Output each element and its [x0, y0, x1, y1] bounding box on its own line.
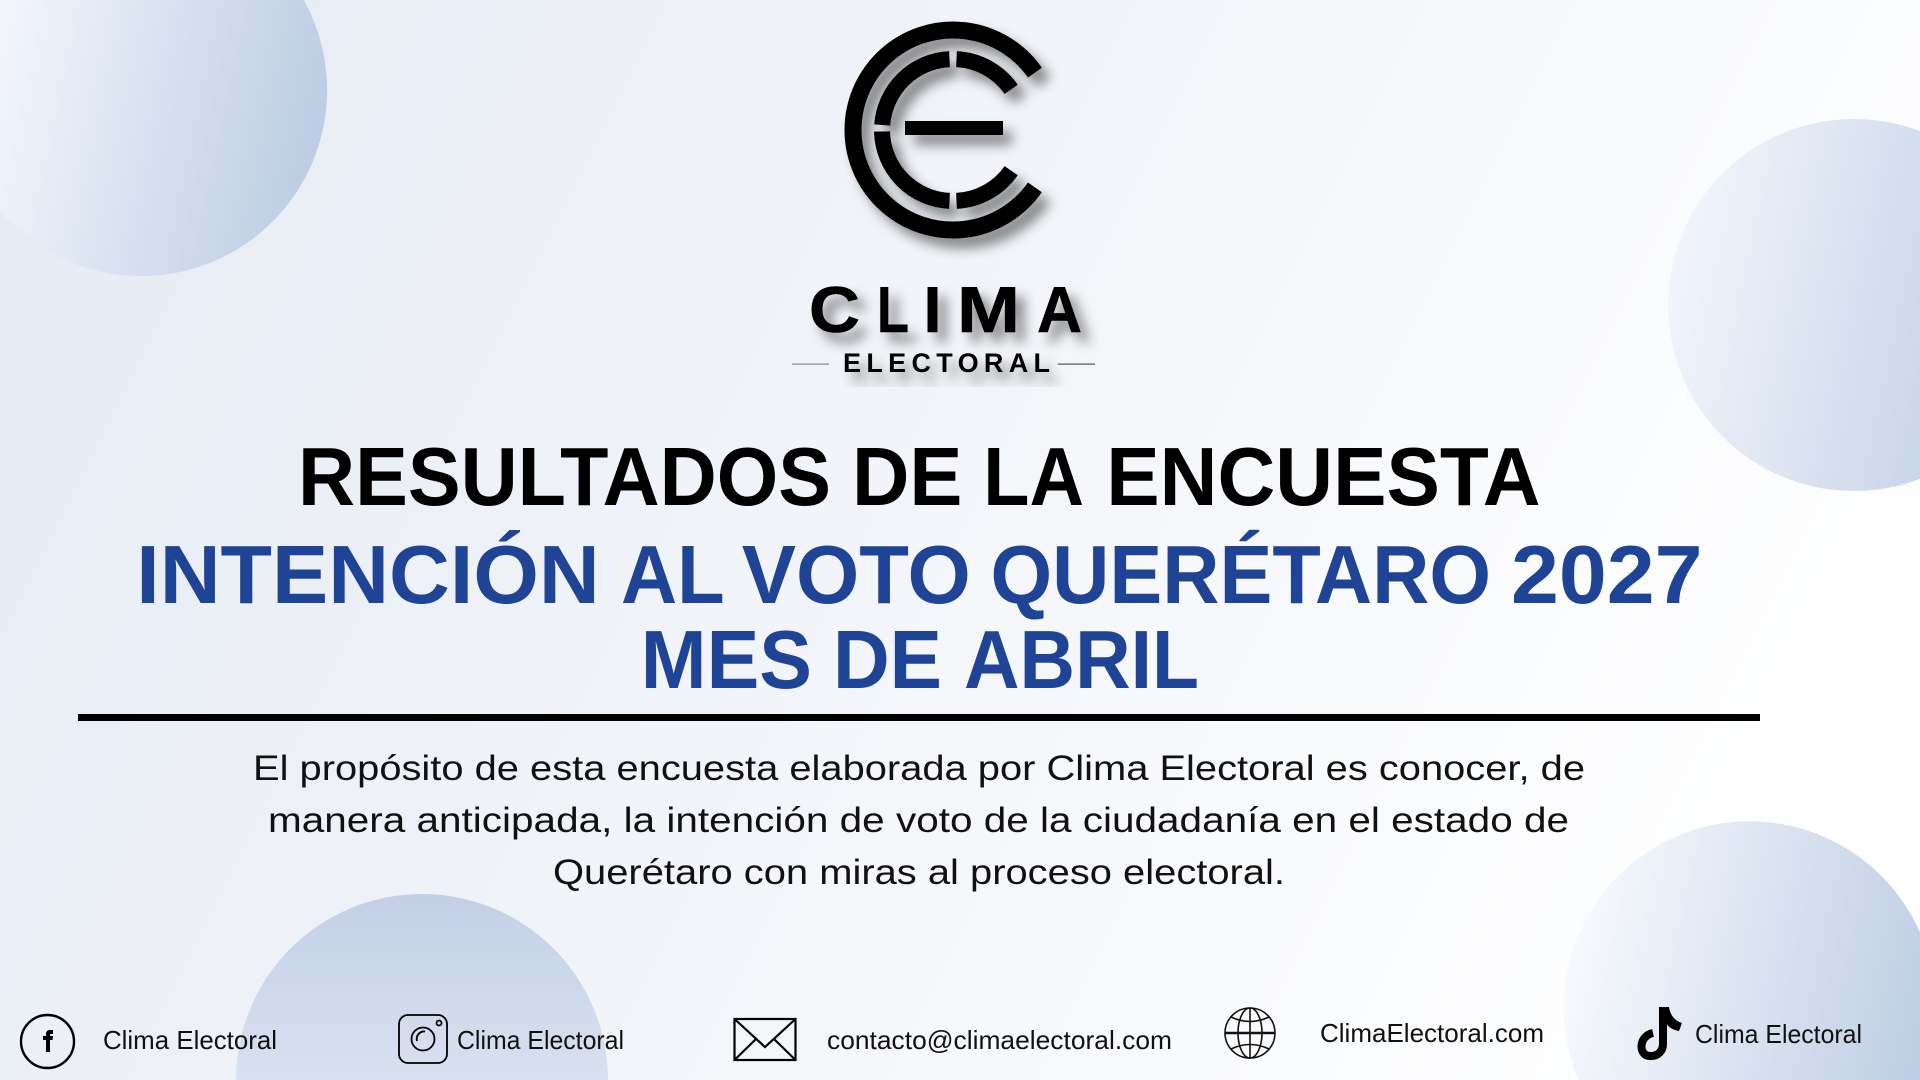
icon: globe — [1225, 1008, 1275, 1058]
footer: email — [734, 1019, 1172, 1060]
subtitle line 1: QUERÉTARO — [990, 528, 1491, 621]
description text: El propósito de esta encuesta elaborada por Clima Electoral es conocer, de — [253, 749, 1585, 788]
logo wordmark: CLIMA: L — [877, 273, 909, 346]
description text: manera anticipada, la intención de voto de la ciudadanía en el estado de — [268, 801, 1569, 840]
label: tiktok: Clima Electoral — [1695, 1019, 1862, 1049]
logo wordmark: CLIMA: C — [809, 273, 860, 346]
logo wordmark: CLIMA — [809, 273, 1082, 346]
footer: TikTok — [1641, 1007, 1862, 1056]
icon: tiktok — [1641, 1007, 1682, 1056]
logo wordmark: CLIMA: A — [1037, 273, 1082, 346]
description text: Querétaro con miras al proceso electoral. — [553, 853, 1285, 892]
subtitle line 2: MES — [641, 613, 812, 706]
subtitle line 1: INTENCIÓN — [136, 528, 600, 621]
title: DE — [852, 430, 962, 523]
footer: website — [1225, 1008, 1544, 1058]
footer: Facebook — [21, 1015, 277, 1068]
title: RESULTADOS — [298, 430, 831, 523]
subtitle line 1: VOTO — [742, 528, 971, 621]
label: email: contacto@climaelectoral.com — [827, 1025, 1172, 1055]
subtitle line 2: ABRIL — [964, 613, 1199, 706]
title: ENCUESTA — [1106, 430, 1541, 523]
logo wordmark: CLIMA: I — [924, 273, 942, 346]
icon: instagram — [399, 1015, 447, 1063]
logo wordmark: ELECTORAL: ELECTORAL — [843, 348, 1050, 378]
decorative circle: top left — [0, 0, 327, 276]
decorative circle: bottom center — [236, 894, 608, 1080]
decorative circle: right — [1668, 119, 1920, 491]
icon: CE monogram — [853, 30, 1035, 230]
subtitle line 1: 2027 — [1511, 528, 1702, 621]
decorative circle: bottom right — [1564, 821, 1920, 1080]
icon: envelope — [734, 1019, 796, 1060]
title: LA — [983, 430, 1084, 523]
subtitle line 1 — [136, 528, 1702, 621]
logo: Clima Electoral — [792, 30, 1095, 378]
footer: Instagram — [399, 1015, 624, 1063]
divider — [78, 714, 1760, 721]
subtitle line 2: DE — [833, 613, 942, 706]
title — [298, 430, 1541, 523]
logo wordmark: CLIMA: M — [957, 273, 1020, 346]
description text — [253, 749, 1585, 892]
label: facebook: Clima Electoral — [103, 1025, 277, 1055]
label: website: ClimaElectoral.com — [1320, 1018, 1544, 1048]
subtitle line 2 — [641, 613, 1199, 706]
icon: facebook — [21, 1015, 74, 1068]
label: instagram: Clima Electoral — [457, 1025, 624, 1055]
subtitle line 1: AL — [621, 528, 725, 621]
